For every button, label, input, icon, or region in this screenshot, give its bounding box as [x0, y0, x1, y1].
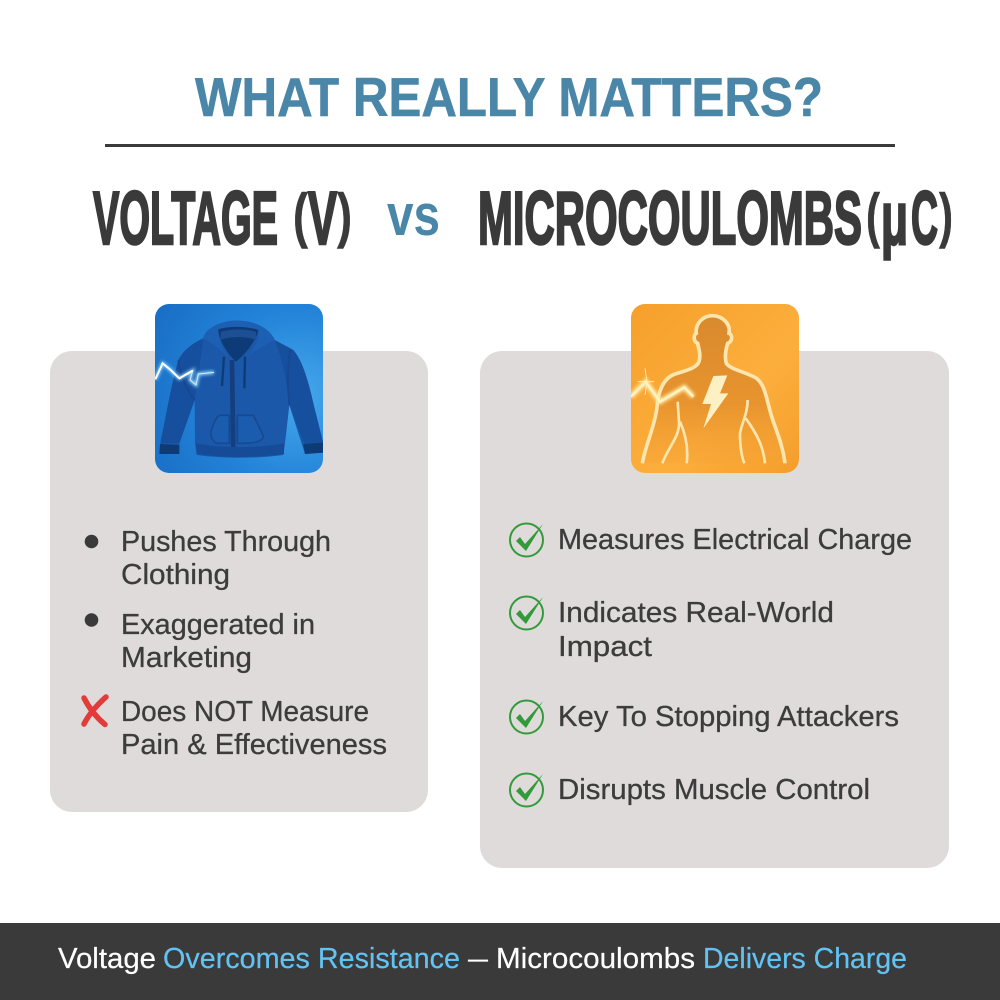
bullet: indicates real-world impact: Impact [558, 631, 652, 663]
bullet: indicates real-world impact: Indicates Real-World [558, 597, 834, 629]
title: WHAT REALLY MATTERS? [195, 66, 823, 128]
bullet: does not measure pain and effectiveness: Pain & Effectiveness [121, 729, 387, 761]
icon: check [510, 524, 543, 556]
bullet: exaggerated in marketing: Exaggerated in [121, 609, 315, 641]
bullet: measures electrical charge: Measures Electrical Charge [558, 524, 912, 556]
icon: body with lightning [631, 304, 799, 473]
footer banner: Voltage [58, 943, 156, 975]
bullet: key to stopping attackers: Key To Stopping Attackers [558, 701, 899, 733]
heading: microcoulombs: C [911, 176, 938, 260]
heading: voltage: ( [293, 182, 308, 249]
bullet: exaggerated in marketing: Marketing [121, 642, 252, 674]
heading: microcoulombs: ( [866, 182, 880, 249]
footer banner: Microcoulombs [496, 943, 695, 975]
panel: microcoulombs [480, 304, 949, 868]
bullet: does not measure pain and effectiveness: Does NOT Measure [121, 696, 369, 728]
bullet: pushes through clothing: Clothing [121, 559, 230, 591]
bullet: does not measure pain and effectiveness [84, 696, 387, 761]
bullet: disrupts muscle control: Disrupts Muscle Control [558, 774, 870, 806]
panel: voltage [50, 304, 428, 812]
icon: check [510, 700, 543, 734]
footer banner [0, 923, 1000, 1000]
heading: voltage: ) [337, 182, 352, 249]
footer banner: — [468, 943, 488, 975]
bullet: indicates real-world impact [510, 596, 834, 663]
bullet: pushes through clothing [85, 526, 331, 591]
heading: voltage: V [308, 176, 337, 260]
icon: jacket with lightning [155, 304, 323, 473]
heading: microcoulombs: μ [881, 176, 908, 260]
icon: check [510, 774, 543, 806]
icon: check [510, 596, 543, 630]
footer banner: Overcomes Resistance [163, 943, 460, 975]
footer banner: Delivers Charge [703, 943, 907, 975]
heading: vs: vs [387, 183, 440, 248]
bullet: exaggerated in marketing [85, 609, 315, 674]
bullet: pushes through clothing: Pushes Through [121, 526, 331, 558]
heading: microcoulombs: ) [939, 182, 953, 249]
heading: voltage: VOLTAGE [93, 176, 278, 260]
